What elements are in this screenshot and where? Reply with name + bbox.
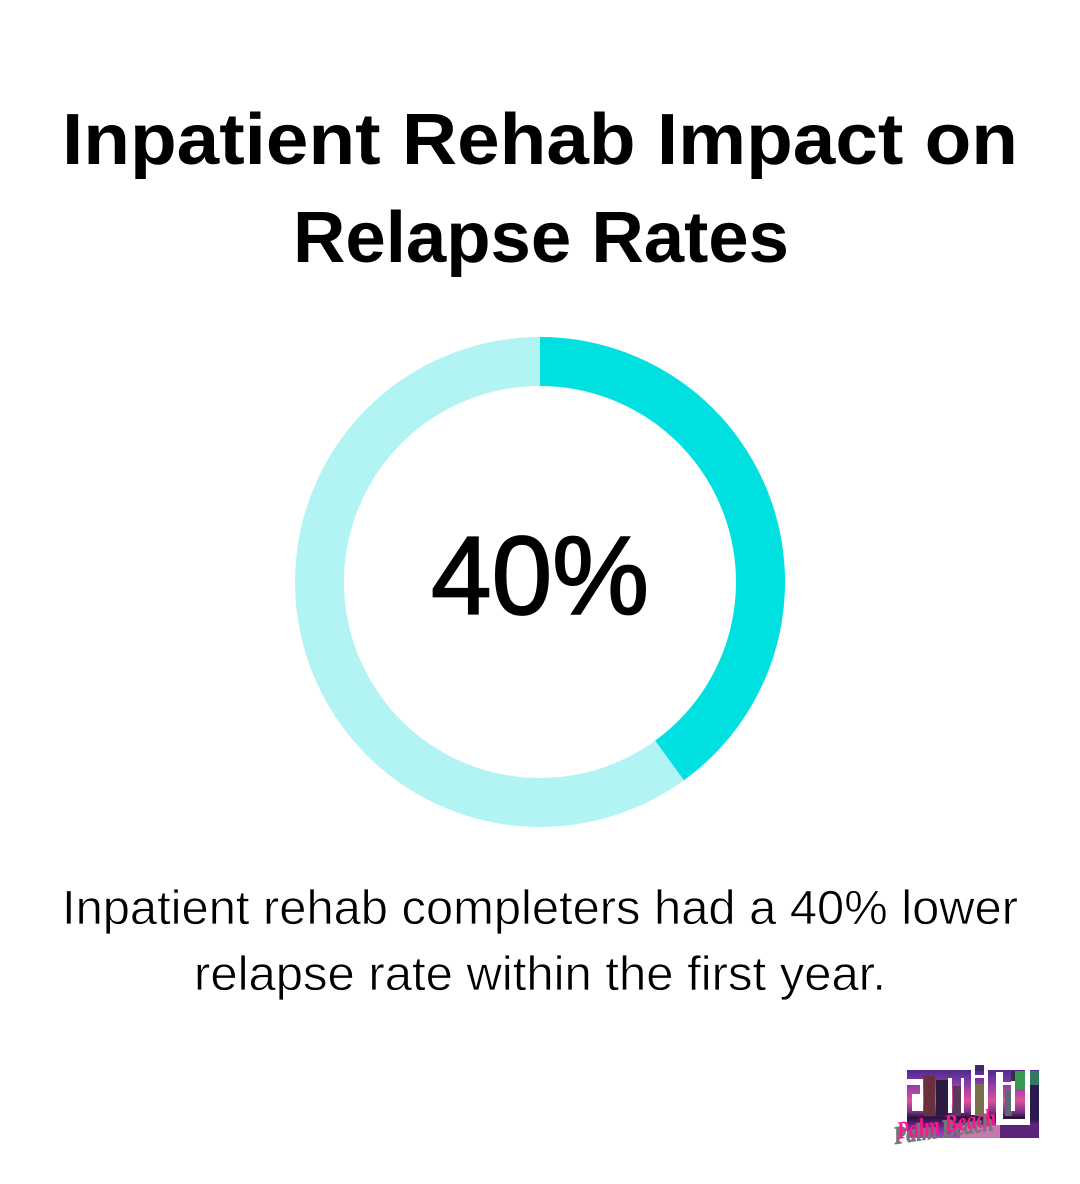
center value: 40% (431, 514, 649, 638)
donut chart: 40% (320, 362, 761, 802)
logo skyline image (907, 1065, 1039, 1138)
logo script: Palm Beach (894, 1104, 998, 1145)
logo white letter gaps (907, 1065, 1030, 1125)
logo script shadow: Palm Beach (891, 1109, 995, 1150)
description text (62, 882, 1018, 1001)
description text: Inpatient rehab completers had a 40% lower (62, 882, 1018, 935)
description text: relapse rate within the first year. (194, 948, 886, 1001)
logo: Amity Palm Beach (891, 1065, 1039, 1150)
donut value arc (540, 362, 761, 760)
title: Inpatient Rehab Impact on (62, 100, 1018, 180)
title: Relapse Rates (293, 198, 789, 278)
title (62, 100, 1018, 278)
donut track (320, 362, 760, 802)
